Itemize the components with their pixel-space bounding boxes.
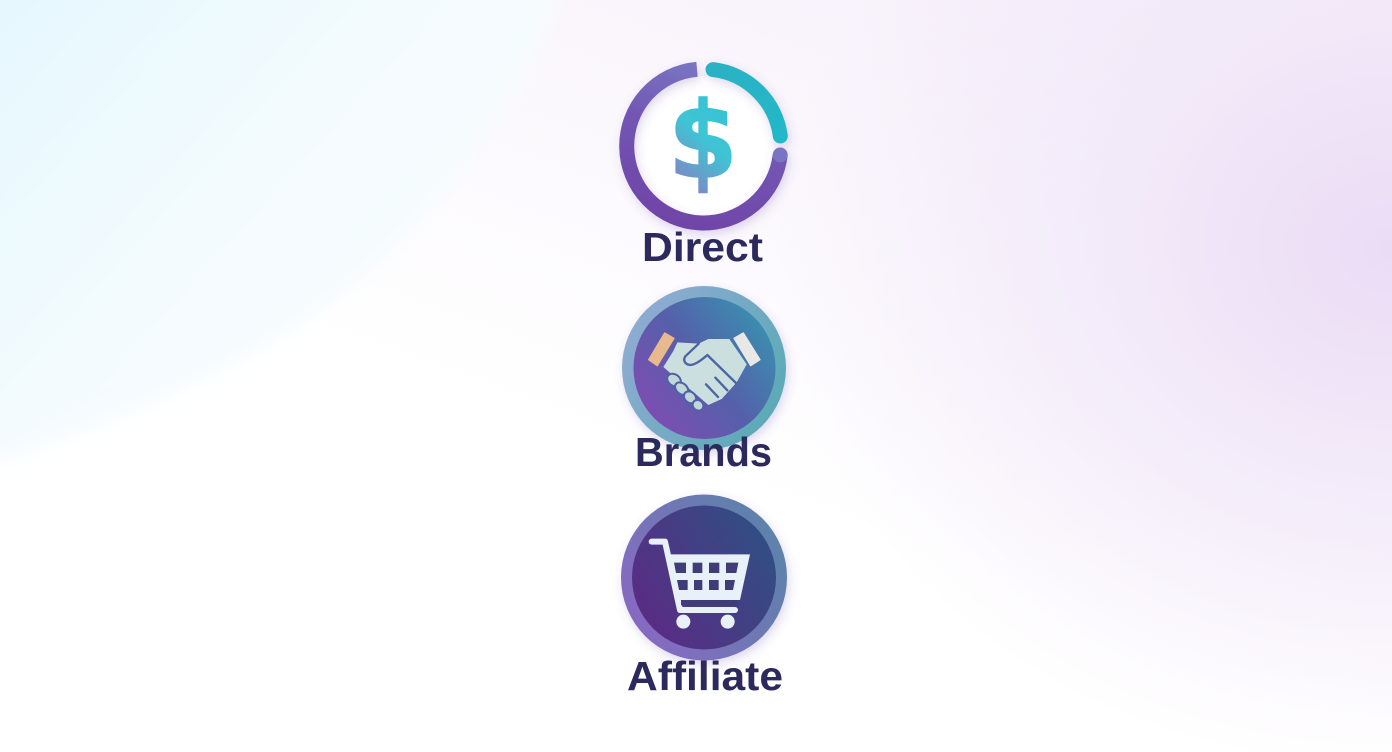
icon: shopping cart badge: [621, 494, 787, 660]
item: Brands: [622, 286, 786, 475]
item: Affiliate: [621, 494, 787, 699]
icon: dollar ring: [627, 69, 788, 223]
icon: handshake badge: [622, 286, 786, 450]
item: Direct: [627, 69, 788, 270]
icon: dollar sign: $: [668, 81, 738, 203]
background: cyan wedge: [0, 0, 570, 470]
label: Brands: Brands: [635, 429, 772, 475]
label: Affiliate: Affiliate: [627, 653, 783, 699]
label: Direct: Direct: [642, 224, 763, 270]
